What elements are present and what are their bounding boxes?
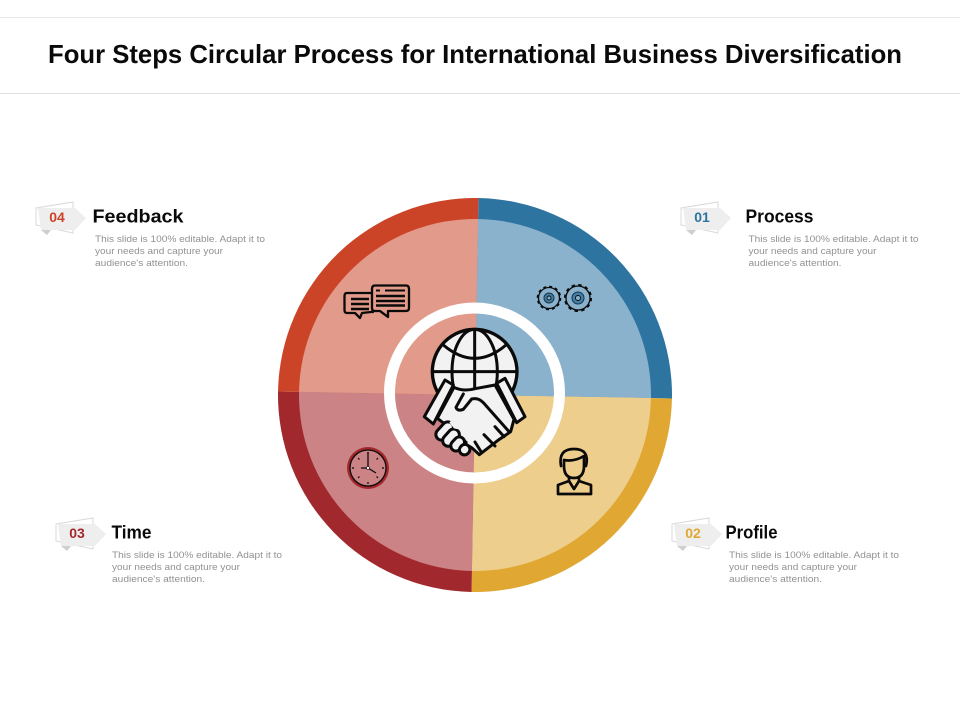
circular process diagram	[275, 195, 675, 595]
badge 01	[681, 202, 731, 235]
badge 03: 03	[69, 525, 85, 541]
body text	[95, 234, 265, 268]
icon: clock	[347, 447, 389, 489]
body text	[729, 550, 899, 584]
body text: audience's attention.	[748, 258, 842, 268]
icon: speech bubbles	[344, 286, 409, 318]
body text: your needs and capture your	[748, 246, 876, 256]
step 04: feedback	[36, 202, 265, 268]
badge 04	[36, 202, 86, 235]
body text: audience's attention.	[729, 574, 822, 584]
body text: This slide is 100% editable. Adapt it to	[112, 550, 282, 560]
body text: your needs and capture your	[95, 246, 223, 256]
heading: Profile	[726, 522, 778, 542]
segment: outer and inner quadrants	[275, 195, 675, 595]
icon: gears	[538, 285, 591, 311]
body text: This slide is 100% editable. Adapt it to	[729, 550, 899, 560]
badge 02: 02	[685, 525, 701, 541]
body text: your needs and capture your	[729, 562, 857, 572]
body text: This slide is 100% editable. Adapt it to	[748, 234, 918, 244]
heading: Process	[746, 206, 814, 226]
icon: person	[558, 449, 591, 494]
body text: audience's attention.	[112, 574, 205, 584]
badge 01: 01	[694, 209, 710, 225]
body text	[748, 234, 918, 268]
badge 02	[672, 518, 722, 551]
body text: your needs and capture your	[112, 562, 240, 572]
badge 04: 04	[49, 209, 65, 225]
step 02: profile	[672, 518, 899, 584]
icon: globe and handshake	[424, 329, 525, 457]
body text: This slide is 100% editable. Adapt it to	[95, 234, 265, 244]
body text	[112, 550, 282, 584]
body text: audience's attention.	[95, 258, 188, 268]
badge 03	[56, 518, 106, 551]
step 03: time	[56, 518, 282, 584]
white ring	[390, 308, 560, 478]
heading: Time	[112, 522, 152, 542]
step 01: process	[681, 202, 918, 268]
title: Four Steps Circular Process for International Business Diversification	[48, 39, 902, 69]
heading: Feedback	[92, 206, 185, 226]
